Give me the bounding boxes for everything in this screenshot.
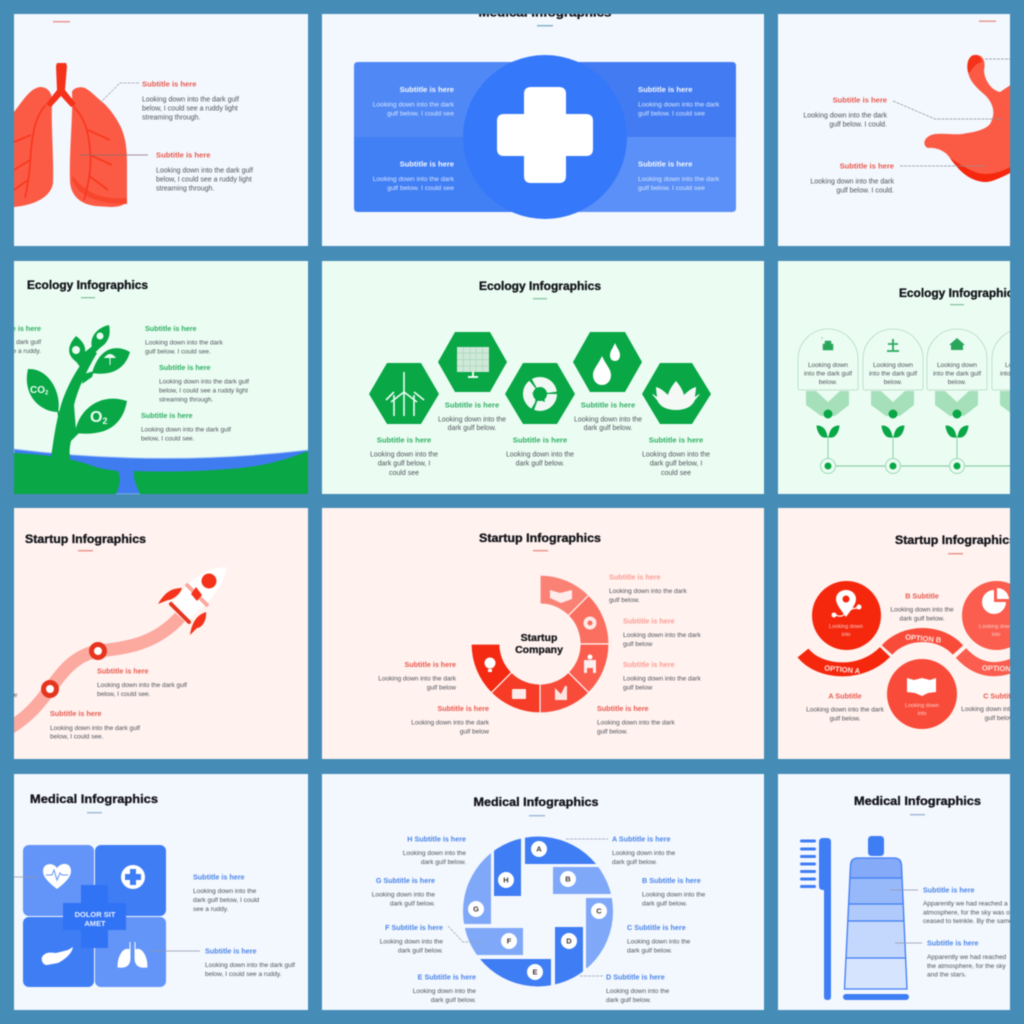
text block: B: Looking down into the <box>890 606 954 614</box>
centre cross label: AMET <box>84 919 106 928</box>
text block: C <box>627 923 691 954</box>
text block: bottom left: Looking down into the dark <box>373 176 455 183</box>
icon: lungs <box>118 942 147 967</box>
text block: segment five: gulf below <box>460 728 489 736</box>
text block: upper milestone: Subtitle is here <box>97 666 149 676</box>
text block: right one <box>145 324 223 356</box>
text block: hexagon two: Looking down into the <box>438 416 506 424</box>
text block: lower: below, I could see a ruddy. <box>205 971 282 978</box>
text block: H: H Subtitle is here <box>407 834 466 844</box>
text block: segment one: Subtitle is here <box>609 572 661 582</box>
letter badges: H <box>503 876 509 885</box>
text block: top left: gulf below. I could see <box>387 110 454 118</box>
hexagon: lotus <box>642 363 711 424</box>
letter badges: A <box>536 845 542 854</box>
circle with cross icon <box>463 55 627 219</box>
title underline <box>979 20 996 22</box>
column three: Looking down <box>937 362 977 369</box>
text block: hexagon three <box>506 436 574 468</box>
donut centre label <box>515 632 563 656</box>
column two: Looking down <box>873 362 913 369</box>
text block: F: F Subtitle is here <box>385 923 443 932</box>
circle C with handshake icon <box>887 659 957 729</box>
text block: D: D Subtitle is here <box>606 972 665 982</box>
text block: F: dark gulf below. <box>398 948 443 954</box>
text block: segment four: Looking down into the dark <box>597 720 675 726</box>
callout lines <box>448 839 608 976</box>
water <box>14 449 308 494</box>
text block: lower: Subtitle is here <box>840 162 894 170</box>
text block: C: C Subtitle <box>983 692 1017 700</box>
circle A with route icon <box>812 581 881 650</box>
title underline <box>533 298 547 299</box>
text block: upper <box>803 96 887 128</box>
title: Ecology Infographics <box>899 286 1020 300</box>
text block: subtitle two: Subtitle is here <box>156 150 210 160</box>
text block: right three: below, I could see. <box>141 436 195 442</box>
text block: right two: Subtitle is here <box>159 363 211 372</box>
centre cross label <box>63 885 126 948</box>
text block: segment one <box>609 572 687 604</box>
text block: G: G Subtitle is here <box>376 876 435 885</box>
text block: segment one: Looking down into the dark <box>609 588 687 595</box>
title underline <box>950 304 964 305</box>
text block: B: dark gulf below. <box>642 900 687 908</box>
text block: hexagon one: could see <box>389 470 419 477</box>
text block: upper milestone <box>97 666 187 698</box>
text block: lower <box>927 938 1007 978</box>
text block: segment six: Subtitle is here <box>404 660 456 669</box>
tree with leaves: 2 <box>45 390 49 396</box>
text block: segment two: Looking down into the dark <box>623 632 701 639</box>
text block: subtitle two: Looking down into the dark gulf <box>156 168 253 174</box>
text block: segment three: Looking down into the dark <box>623 676 701 682</box>
text block: lower milestone: below, I could see. <box>50 734 104 740</box>
title underline <box>87 812 102 813</box>
four squares <box>23 845 166 987</box>
text block: segment one: gulf below. <box>609 597 640 604</box>
text block: E: Looking down into the <box>413 988 476 995</box>
text block: lower milestone: Looking down into the dark gulf <box>50 725 140 732</box>
text block: segment six: Looking down into the dark <box>378 676 457 682</box>
text block: segment four: gulf below. <box>597 728 628 736</box>
text block: segment four: Subtitle is here <box>597 704 649 713</box>
donut icons <box>484 590 596 700</box>
hexagon: wind turbines <box>369 363 439 424</box>
text block: lower: Apparently we had reached <box>927 954 1007 961</box>
text block: subtitle one: below, I could see a ruddy light <box>142 106 238 112</box>
callout line bottom <box>80 154 148 156</box>
text block: hexagon two: Subtitle is here <box>445 400 499 410</box>
text block: lower milestone: Subtitle is here <box>50 709 102 718</box>
text block: lower: and the stars. <box>927 972 967 978</box>
text block: top right: Subtitle is here <box>638 85 692 94</box>
donut centre label: Company <box>515 644 563 656</box>
donut centre label: Startup <box>521 632 557 644</box>
text block: A: Looking down into the <box>612 850 676 857</box>
title: Medical Infographics <box>854 794 981 808</box>
tree with leaves: 2 <box>102 416 107 426</box>
text block: upper milestone: below, I could see. <box>97 691 151 698</box>
circle B with pie icon: Looking down <box>979 624 1013 630</box>
letter badges: D <box>566 937 572 946</box>
tree with leaves: O <box>90 409 102 426</box>
title underline <box>53 21 70 22</box>
text block: segment two: Subtitle is here <box>623 616 675 626</box>
text block: subtitle two: streaming through. <box>156 186 214 192</box>
text block: B <box>642 876 706 908</box>
trail <box>8 617 180 729</box>
text block: right two: below, I could see a ruddy light <box>159 388 248 394</box>
column three: into the dark gulf <box>933 370 981 378</box>
text block: subtitle two <box>156 150 253 192</box>
text block: C: dark gulf below. <box>627 948 672 954</box>
text block: lower: Subtitle is here <box>927 938 979 948</box>
text block: segment two: gulf below <box>623 641 653 648</box>
text block: upper: Subtitle is here <box>833 96 887 104</box>
title: Medical Infographics <box>30 792 158 806</box>
text block: segment six <box>378 660 457 692</box>
text block: upper milestone: Looking down into the dark gulf <box>97 682 187 689</box>
callout lines <box>14 877 200 951</box>
text block: hexagon five: Looking down into the <box>642 452 710 458</box>
letter badges <box>468 841 607 980</box>
lungs illustration <box>14 63 127 207</box>
donut chart <box>471 575 609 713</box>
text block: D <box>606 972 670 1004</box>
text block: top right <box>638 85 720 118</box>
text block: lower: Looking down into the dark <box>810 178 894 186</box>
text block: lower <box>205 946 295 978</box>
title: Ecology Infographics <box>27 278 148 292</box>
card quadrants <box>354 62 736 212</box>
text block: A: dark gulf below. <box>612 859 657 866</box>
column two: below. <box>884 379 902 386</box>
callout line top <box>100 83 140 103</box>
text block: top left <box>373 85 455 118</box>
milestone ring upper <box>92 644 104 658</box>
text block: hexagon five: dark gulf below, I <box>650 460 702 468</box>
letter badges: E <box>532 968 538 977</box>
title underline <box>537 25 553 26</box>
icon: hand <box>42 947 73 965</box>
text block: segment five: Subtitle is here <box>437 704 489 713</box>
text block: upper: Apparently we had reached a <box>923 900 1008 908</box>
text block: segment three: Subtitle is here <box>623 660 675 669</box>
text block: bottom right: Looking down into the dark <box>638 176 720 183</box>
column two: into the dark gulf <box>869 370 917 378</box>
ribbon labels: OPTION A <box>824 663 861 676</box>
text block: hexagon three: dark gulf below. <box>516 460 564 468</box>
column four cropped <box>992 329 1024 416</box>
text block: bottom left: Subtitle is here <box>400 160 454 168</box>
text block: B: B Subtitle is here <box>642 876 701 885</box>
text block: E: dark gulf below. <box>431 997 476 1004</box>
text block: upper: Looking down into the <box>193 888 257 895</box>
text block: right two <box>159 363 249 404</box>
text block: hexagon four <box>574 400 642 432</box>
text block: segment three: gulf below <box>623 684 653 692</box>
text block: segment five: Looking down into the dark <box>411 720 490 726</box>
text block: lower <box>810 162 894 194</box>
panel: ecology tree <box>0 261 308 494</box>
column one: into the dark gulf <box>804 370 852 378</box>
title: Startup Infographics <box>479 531 601 545</box>
text block: A: A Subtitle is here <box>612 834 670 844</box>
centre cross label: DOLOR SIT <box>75 910 116 919</box>
title underline <box>910 814 925 815</box>
circle segments <box>460 836 616 989</box>
text block: C: C Subtitle is here <box>627 923 686 932</box>
text block: C <box>961 692 1024 722</box>
title underline <box>529 815 545 816</box>
column one <box>798 329 858 474</box>
text block: H: Looking down into the <box>403 850 466 857</box>
text block: right three: Looking down into the dark gulf <box>141 426 231 434</box>
column one: below. <box>819 379 837 386</box>
hexagon: water drops <box>573 332 642 392</box>
tree with leaves: CO <box>30 385 45 396</box>
rocket <box>158 567 226 635</box>
text block: top right: gulf below. I could see <box>638 110 705 118</box>
text block: bottom left <box>373 160 455 192</box>
text block: right three <box>141 411 231 442</box>
text block: subtitle two: below, I could see a ruddy light <box>156 176 252 184</box>
title underline <box>78 550 93 551</box>
stomach illustration <box>924 55 1012 182</box>
letter badges: B <box>565 875 571 884</box>
circle B with pie icon: into <box>992 632 1000 638</box>
text block: lower milestone <box>50 709 140 740</box>
column two <box>863 329 923 474</box>
title: Startup Infographics <box>895 533 1016 547</box>
text block: hexagon one: Subtitle is here <box>377 436 431 444</box>
panel: toothpaste <box>778 774 1013 1010</box>
text block: hexagon one: Looking down into the <box>370 452 438 458</box>
letter badges: G <box>473 905 479 914</box>
circle C with handshake icon: Looking down <box>905 703 939 709</box>
text block: C: Looking down into the <box>627 938 691 946</box>
text block: segment three <box>623 660 701 692</box>
text block: E: E Subtitle is here <box>418 972 476 982</box>
text block: hexagon two: dark gulf below. <box>448 425 496 432</box>
circle A with route icon: Looking down <box>829 624 863 630</box>
text block: F <box>380 923 443 954</box>
text block: upper <box>193 872 260 913</box>
panel: medical segmented circle <box>322 774 764 1010</box>
text block: segment five <box>411 704 490 736</box>
text block: E <box>413 972 476 1004</box>
text block: H: dark gulf below. <box>421 859 466 866</box>
text block: bottom right <box>638 160 720 192</box>
hexagon: solar panel <box>438 332 507 392</box>
text block: D: dark gulf below. <box>606 997 651 1004</box>
text block: B: dark gulf below. <box>899 616 945 622</box>
column four cropped: into the <box>1000 370 1022 378</box>
text block: C: gulf below. <box>985 715 1016 722</box>
column one: Looking down <box>808 362 848 369</box>
text block: upper: ceased to twinkle. By the same <box>923 918 1013 925</box>
text block: subtitle one: streaming through. <box>142 114 200 122</box>
text block: D: Looking down into the <box>606 988 670 995</box>
text block: hexagon four: Looking down into the <box>574 416 642 424</box>
text block: hexagon one: dark gulf below, I <box>378 460 430 468</box>
text block: upper: gulf below. I could. <box>829 122 887 128</box>
panel: ecology timeline <box>778 261 1024 494</box>
title underline <box>533 550 548 551</box>
text block: upper: Looking down into the dark <box>803 112 887 120</box>
text block: hexagon four: dark gulf below. <box>584 425 632 432</box>
ribbon wave <box>803 635 1024 669</box>
ribbon labels: OPTION C <box>982 663 1019 674</box>
text block: B <box>890 592 954 622</box>
title underline <box>948 553 963 554</box>
panel: lungs <box>0 0 308 246</box>
text block: hexagon five: could see <box>661 470 691 477</box>
text block: upper <box>923 886 1013 925</box>
column three: below. <box>948 379 966 386</box>
title underline <box>81 297 95 298</box>
column three <box>927 329 987 474</box>
icon: medical cross <box>121 865 145 889</box>
text block: hexagon three: Subtitle is here <box>513 436 567 444</box>
text block: hexagon five: Subtitle is here <box>649 436 703 444</box>
milestone ring lower <box>44 682 56 696</box>
text block: subtitle one: Looking down into the dark gulf <box>142 96 239 104</box>
title: Startup Infographics <box>25 532 146 546</box>
callout lines <box>893 59 1012 166</box>
text block: hexagon five <box>642 436 710 477</box>
text block: hexagon two <box>438 400 506 432</box>
tree with leaves <box>27 325 130 466</box>
text block: hexagon four: Subtitle is here <box>581 400 635 410</box>
title: Ecology Infographics <box>479 279 601 293</box>
text block: B: B Subtitle <box>905 592 939 600</box>
icon: heart <box>43 864 71 889</box>
text block: F: Looking down into the <box>380 938 443 946</box>
text block: right two: streaming through. <box>159 396 213 404</box>
text block: upper: dark gulf below, I could <box>193 897 260 904</box>
panel: medical cross <box>322 6 764 246</box>
text block: A <box>612 834 676 866</box>
letter badges: F <box>507 937 512 946</box>
hexagon: recycling <box>505 363 575 424</box>
text block: upper: Subtitle is here <box>193 872 245 882</box>
text block: A: A Subtitle <box>828 692 862 700</box>
text block: segment two <box>623 616 701 648</box>
text block: right three: Subtitle is here <box>141 411 193 420</box>
letter badges: C <box>596 907 602 916</box>
text block: right two: Looking down into the dark gulf <box>159 378 249 386</box>
text block: hexagon one <box>370 436 438 477</box>
ribbon labels: OPTION B <box>905 632 942 645</box>
text block: lower: Subtitle is here <box>205 946 257 956</box>
text block: G: Looking down into the <box>372 892 435 898</box>
toothbrush <box>800 838 831 1000</box>
callout lines <box>890 890 922 943</box>
timeline line <box>828 465 1012 467</box>
toothpaste tube <box>843 836 909 1000</box>
panel: startup options <box>778 508 1024 759</box>
panel: startup donut <box>322 508 764 759</box>
circle A with route icon: into <box>842 632 850 638</box>
text block: segment four <box>597 704 675 736</box>
text block: A <box>806 692 885 722</box>
panel: stomach <box>778 0 1024 246</box>
text block: bottom left: gulf below. I could see <box>387 185 454 192</box>
text block: left cropped <box>14 324 42 356</box>
text block: top left: Looking down into the dark <box>373 102 455 108</box>
text block: A: gulf below. <box>830 716 861 722</box>
title: Medical Infographics <box>478 6 612 20</box>
title: Medical Infographics <box>474 795 599 809</box>
text block: right one: Subtitle is here <box>145 324 197 333</box>
text block: bottom right: Subtitle is here <box>638 160 692 168</box>
text block: top left: Subtitle is here <box>400 85 454 94</box>
text block: top right: Looking down into the dark <box>638 102 720 108</box>
panel: startup rocket <box>5 508 308 759</box>
text block: upper: Subtitle is here <box>923 886 975 894</box>
text block: right one: Looking down into the dark <box>145 340 223 346</box>
text block: lower: gulf below. I could. <box>836 188 894 194</box>
text block: H <box>403 834 466 866</box>
text block: upper: atmosphere, for the sky was o <box>923 910 1010 916</box>
text block: lower: Looking down into the dark gulf <box>205 962 295 969</box>
panel: ecology hexagons <box>322 261 764 494</box>
text block: bottom right: gulf below. I could see <box>638 185 705 192</box>
text block: G: dark gulf below. <box>390 900 435 908</box>
ground <box>14 451 308 494</box>
text block: segment six: gulf below <box>427 684 456 692</box>
text block: lower: the atmosphere, for the sky <box>927 963 1007 970</box>
text block: B: Looking down into the <box>642 892 706 898</box>
text block: G <box>372 876 435 908</box>
text block: A: Looking down into the dark <box>806 706 885 714</box>
text block: subtitle one: Subtitle is here <box>142 80 196 88</box>
panel: medical squares <box>14 774 308 1010</box>
circle C with handshake icon: into <box>918 711 926 717</box>
circle B with pie icon <box>962 581 1024 650</box>
text block: upper: see a ruddy. <box>193 906 228 913</box>
text cropped: time <box>5 692 18 699</box>
ribbon labels <box>824 632 1019 676</box>
text block: hexagon three: Looking down into the <box>506 452 574 458</box>
text block: right one: gulf below. I could see. <box>145 348 211 356</box>
text block: subtitle one <box>142 80 239 122</box>
